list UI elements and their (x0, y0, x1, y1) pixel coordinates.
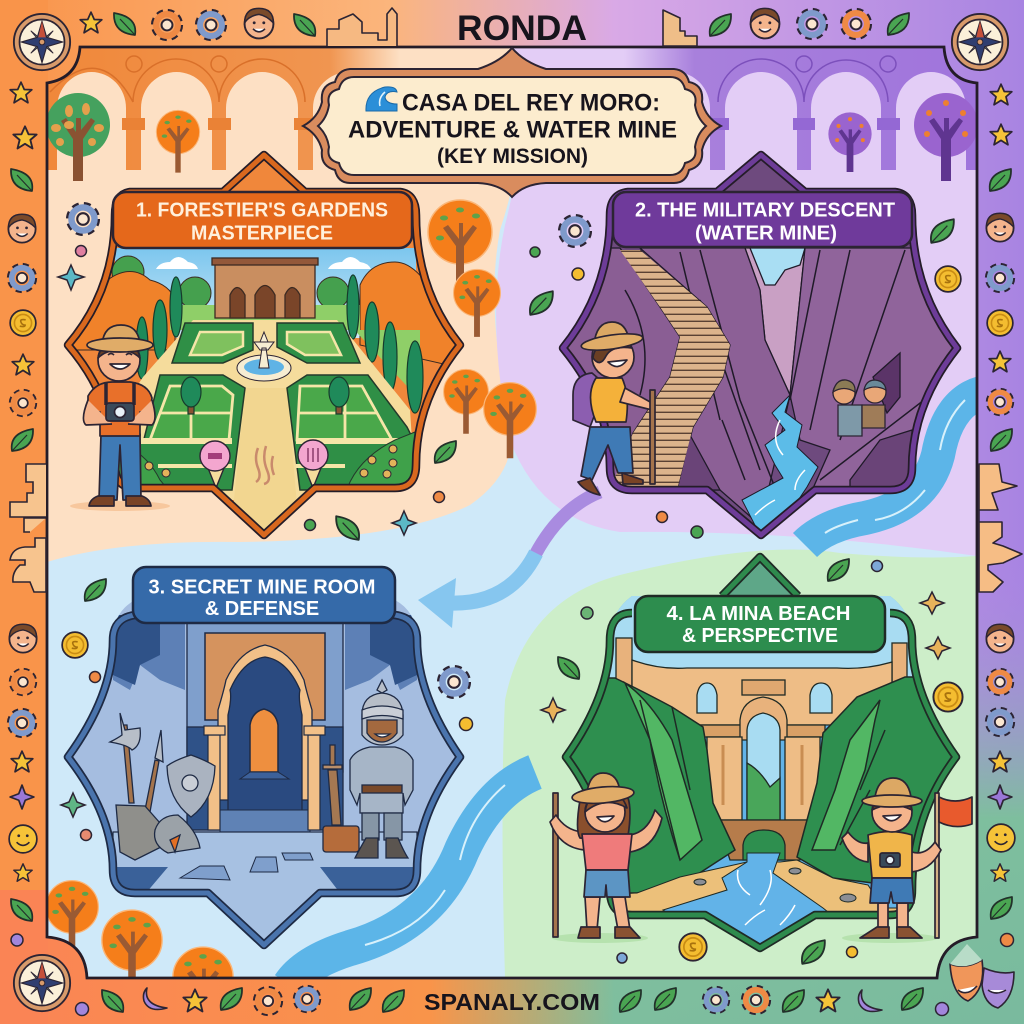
banner 3 (133, 567, 395, 623)
border icons: left (8, 82, 46, 946)
panel 2 frame (563, 155, 957, 535)
pins (200, 440, 328, 488)
icon: wave (366, 87, 397, 111)
fountain (237, 355, 291, 381)
icon: theatre masks (950, 944, 1014, 1008)
banner 2 (613, 192, 912, 247)
footer: SPANALY.COM (424, 989, 600, 1015)
banner 2: (WATER MINE) (695, 222, 837, 244)
bridge (616, 638, 907, 860)
plaque: CASA DEL REY MORO: (402, 90, 660, 117)
stairs (616, 250, 730, 486)
banner 1: MASTERPIECE (191, 222, 333, 244)
garden ground (115, 320, 416, 500)
panel 2: military descent (555, 150, 965, 540)
arcade: orange (47, 47, 400, 170)
weapons (110, 713, 215, 860)
foliage (74, 256, 454, 364)
banner 4: & PERSPECTIVE (682, 625, 838, 647)
panel 4 frame (566, 557, 956, 948)
river: right (805, 392, 985, 545)
cliffs (560, 677, 965, 893)
banner 3: & DEFENSE (205, 598, 319, 620)
plaque: (KEY MISSION) (437, 145, 588, 168)
parterres (115, 323, 416, 490)
bushes (120, 454, 164, 484)
beach and river (626, 860, 896, 911)
scattered icons (58, 206, 963, 964)
cypress (136, 275, 423, 413)
plaque (303, 48, 721, 197)
banner 1 (113, 192, 412, 248)
river: lower (290, 772, 535, 985)
arcade: purple (624, 47, 977, 170)
tourist with camera (70, 325, 170, 511)
sword and chest (323, 745, 359, 852)
border icons: bottom (76, 988, 948, 1016)
hiker girl (550, 773, 662, 943)
panel 3 frame (68, 615, 460, 945)
banner 1: 1. FORESTIER'S GARDENS (136, 200, 388, 222)
banner 4 (635, 596, 885, 652)
border icons: right (979, 84, 1022, 946)
border icons: top (80, 8, 909, 46)
hiker with backpack (573, 322, 655, 495)
banner 3: 3. SECRET MINE ROOM (148, 576, 376, 598)
banner 2: 2. THE MILITARY DESCENT (635, 200, 895, 222)
title: RONDA (457, 9, 587, 48)
panel 4: la mina beach (550, 555, 972, 955)
river: descent arrow (418, 492, 600, 628)
water (742, 395, 818, 535)
hiker boy (842, 778, 972, 943)
panel 3: secret mine room (60, 567, 470, 952)
guard (350, 680, 413, 858)
panel 1: gardens (60, 150, 470, 540)
steam (256, 446, 274, 484)
clouds (156, 257, 371, 269)
pavilion (212, 258, 318, 318)
banner 4: 4. LA MINA BEACH (666, 603, 850, 625)
soldiers (833, 380, 886, 436)
panel 1 frame (68, 155, 460, 535)
plaque: ADVENTURE & WATER MINE (348, 116, 677, 144)
